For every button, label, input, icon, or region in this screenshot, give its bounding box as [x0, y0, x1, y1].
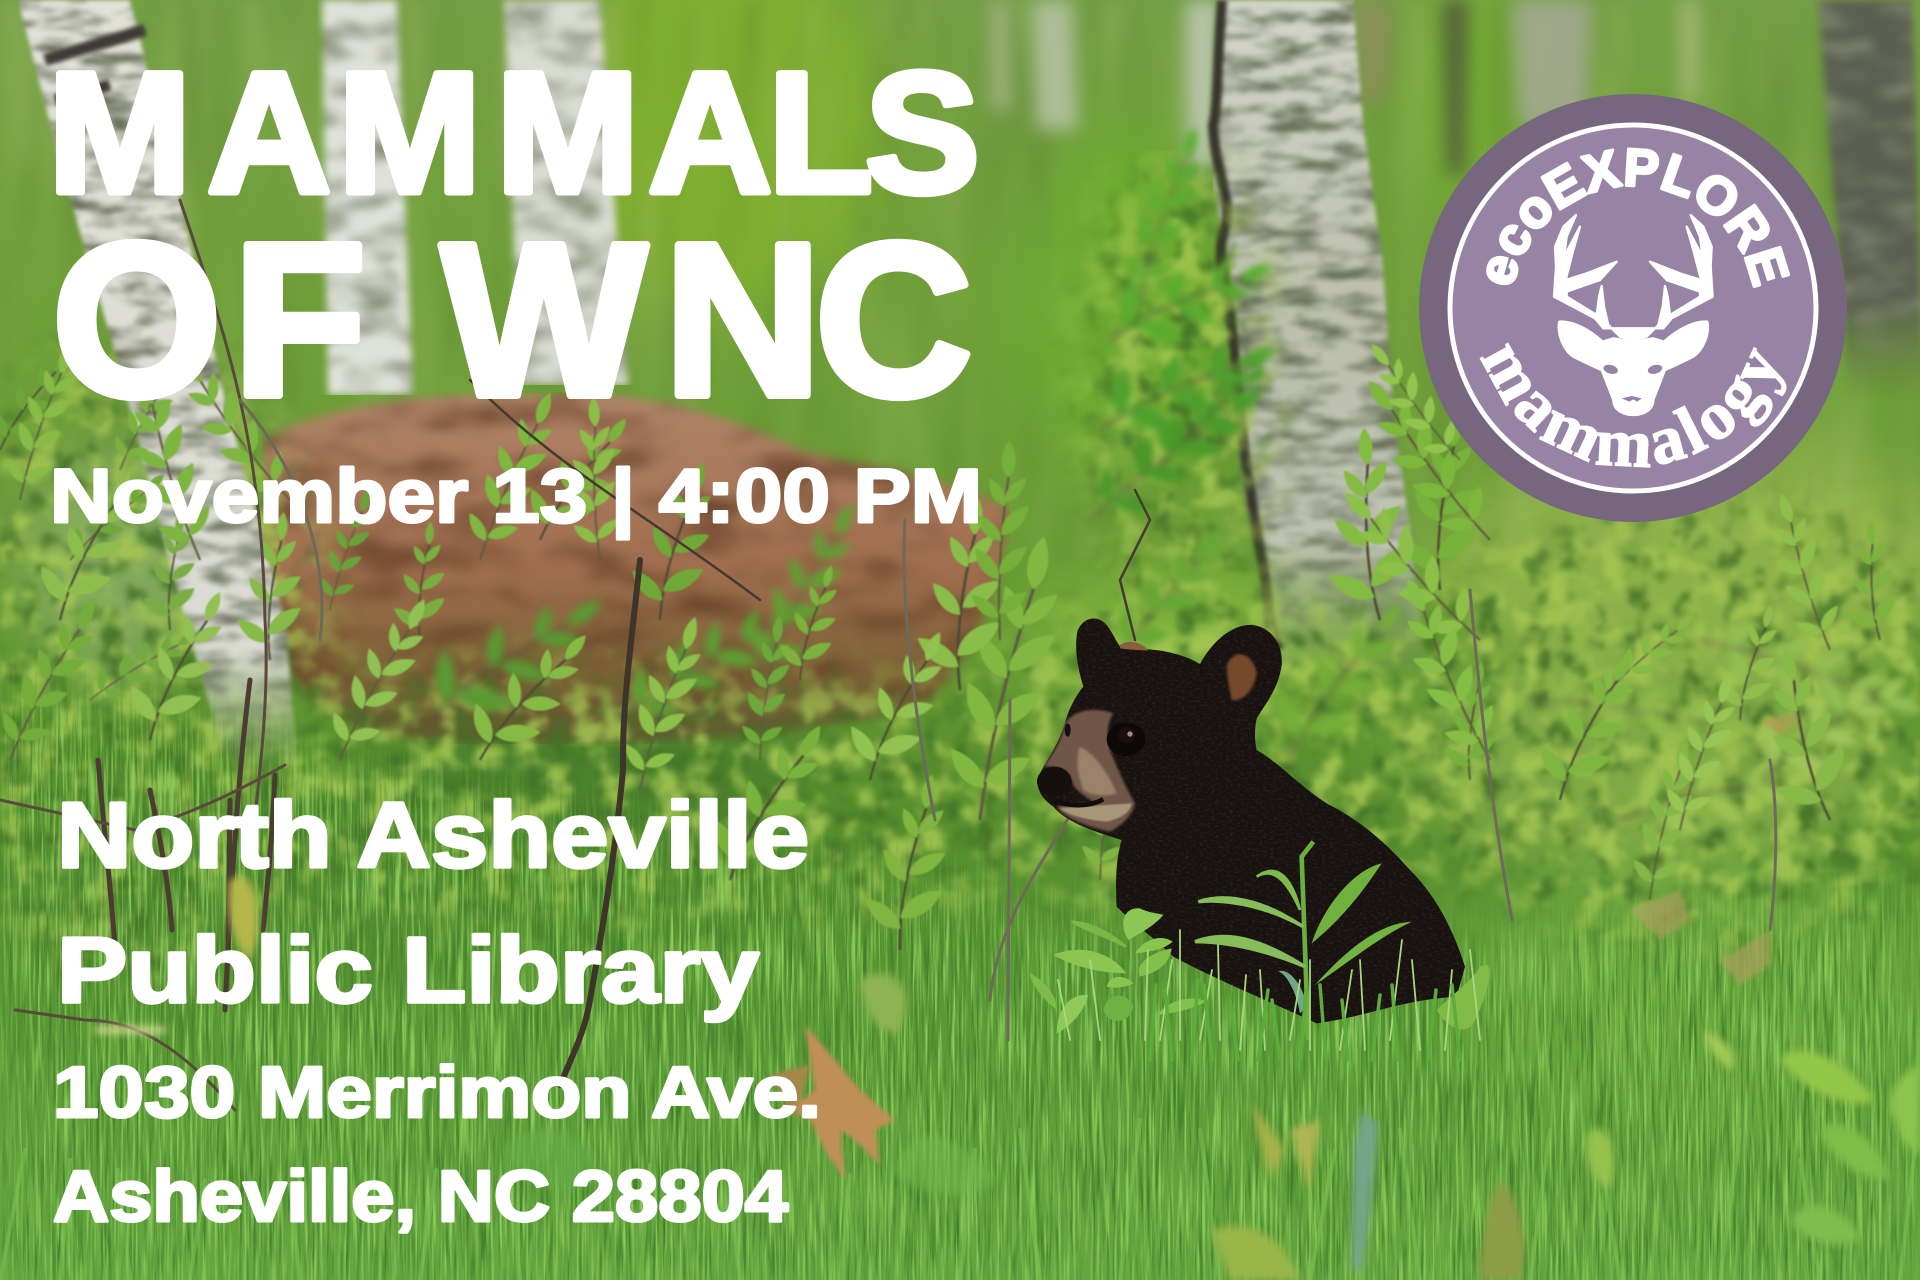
foliage texture	[0, 152, 1920, 998]
title: MAMMALS: MAMMALS	[48, 37, 980, 229]
grass blades over bear	[0, 930, 1915, 1280]
foreground plant and leaves by bear	[1030, 842, 1490, 1040]
boulder	[262, 393, 1010, 744]
grass	[0, 620, 1920, 1280]
sharp shrubs	[0, 330, 1920, 955]
venue name	[57, 783, 809, 1022]
icon: deer head	[1554, 215, 1713, 415]
badge text: ecoEXPLORE: ecoEXPLORE	[1486, 148, 1790, 288]
date and time: November 13 | 4:00 PM	[50, 454, 982, 540]
venue address: 1030 Merrimon Ave.	[53, 1053, 821, 1133]
bare stems	[0, 200, 1776, 1110]
venue address	[53, 1053, 821, 1237]
maple leaf	[770, 715, 1800, 1180]
blurred mid bushes	[413, 117, 1920, 870]
venue name: Public Library	[57, 918, 759, 1022]
venue name: North Asheville	[57, 783, 809, 887]
left birch trunk	[18, 0, 298, 770]
title: OF WNC: OF WNC	[52, 199, 972, 442]
black bear cub	[1037, 618, 1465, 1023]
background birch trees	[322, 0, 1920, 680]
venue address: Asheville, NC 28804	[53, 1157, 788, 1237]
ecoEXPLORE mammalogy badge	[1419, 94, 1847, 522]
blurred foreground leaves	[95, 877, 1920, 1280]
badge text: mammalogy: mammalogy	[1480, 342, 1786, 468]
